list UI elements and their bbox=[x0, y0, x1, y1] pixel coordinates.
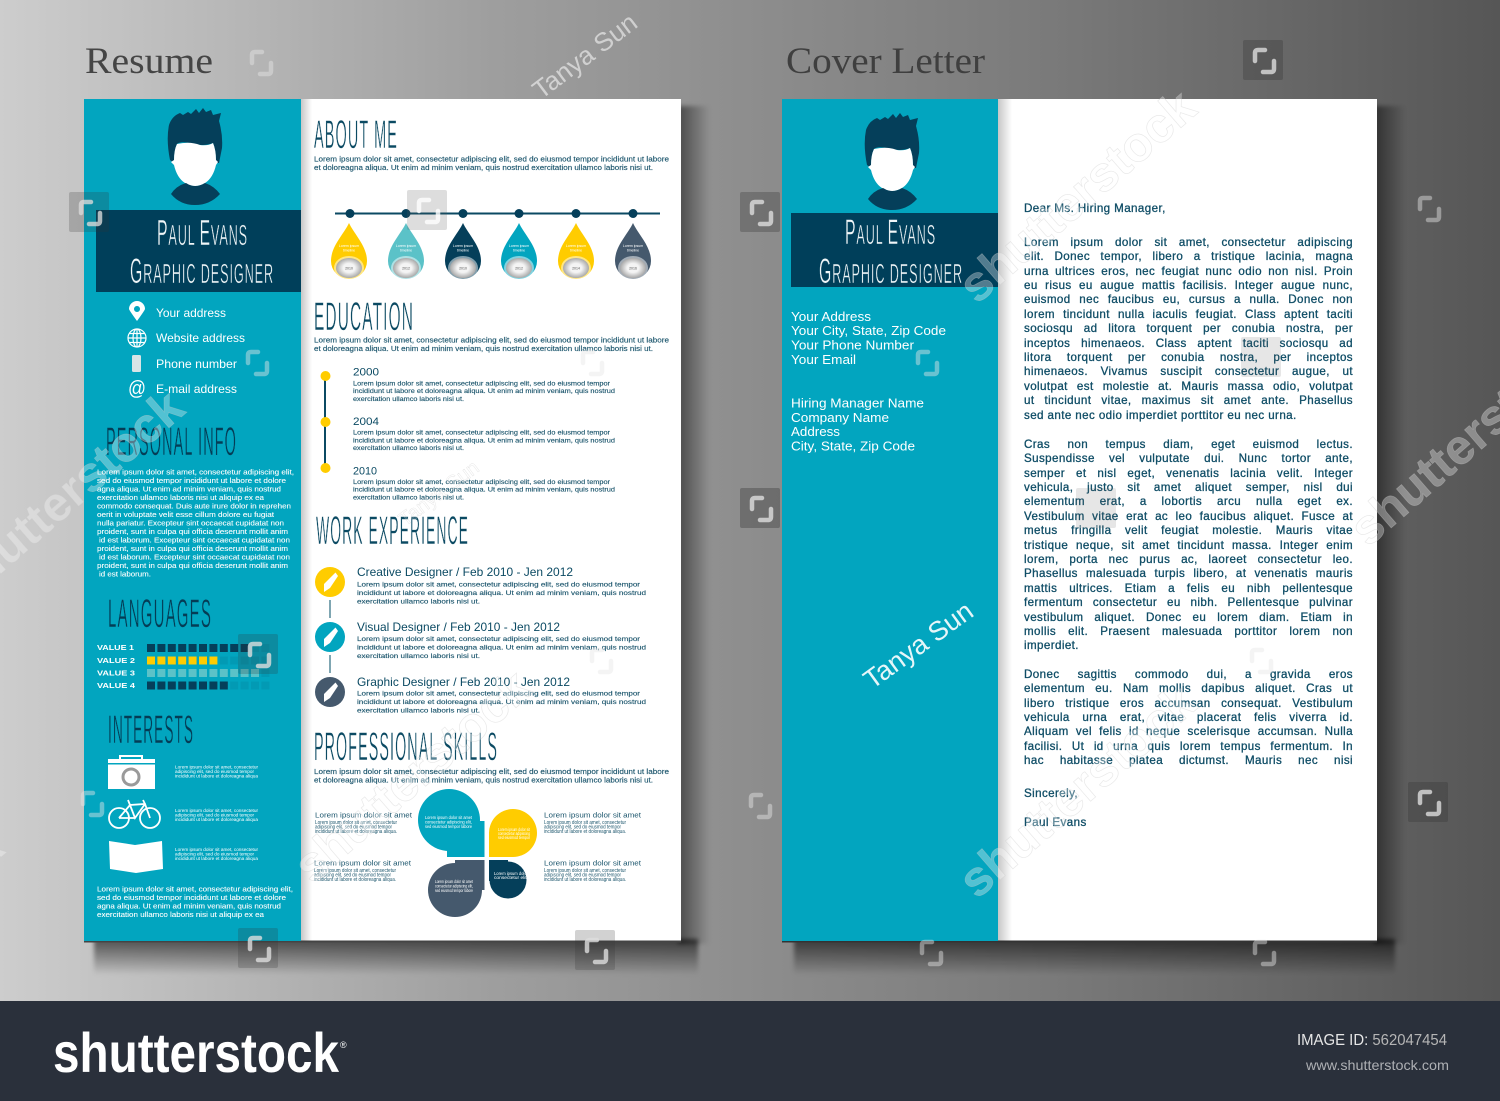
entry 2004: exercitation ullamco laboris nisi ut. bbox=[353, 445, 464, 452]
name banner: PAUL EVANS bbox=[845, 213, 936, 252]
drop 2010 dark: 2010 bbox=[459, 266, 467, 270]
sender details: Your Phone Number bbox=[791, 338, 915, 352]
icon: camera bbox=[108, 756, 155, 789]
entry 2000: exercitation ullamco laboris nisi ut. bbox=[353, 396, 464, 403]
sender details: Your Email bbox=[791, 352, 856, 367]
skill petal: teal: sed eiusmod tempor labore bbox=[425, 824, 472, 829]
entry 2010: Lorem ipsum dolor sit amet, consectetur adipiscing elit, sed do eiusmod tempor bbox=[353, 479, 611, 486]
skill petal: teal bbox=[418, 789, 484, 857]
section: interests: adipiscing elit, sed do eiusmod tempor bbox=[175, 852, 255, 856]
skill petal: slate: consectetur adipiscing elit, bbox=[435, 884, 473, 888]
skill petal: dark: consectetur elit, bbox=[494, 875, 528, 880]
skill petal: slate bbox=[428, 860, 484, 917]
skill petal: yellow: sed eiusmod tempor bbox=[498, 835, 530, 840]
name banner: GRAPHIC DESIGNER bbox=[130, 252, 274, 291]
job 1: Creative Designer / Feb 2010 - Jen 2012 bbox=[357, 565, 573, 579]
footer bar: ® bbox=[340, 1040, 347, 1050]
section: personal info: sed do eiusmod tempor incididunt ut labore et dolore bbox=[97, 476, 286, 485]
section: personal info: proident, sunt in culpa qui officia deserunt mollit anim bbox=[97, 544, 288, 553]
recipient details: Company Name bbox=[791, 410, 889, 425]
cover letter sign-off: Paul Evans bbox=[1024, 816, 1087, 829]
section: education: EDUCATION bbox=[314, 295, 414, 339]
icon: slate pen bbox=[315, 677, 345, 707]
drop 2010: Lorem ipsum bbox=[339, 244, 359, 248]
drop 2014 bbox=[558, 223, 594, 280]
bar chart: language levels bbox=[147, 644, 269, 690]
watermark: shutterstock marks: shutterstock bbox=[949, 674, 1207, 908]
skill label: top right: incididunt ut labore et doloreagna aliqua. bbox=[544, 829, 626, 835]
section: personal info: nulla pariatur. Excepteur sint occaecat cupidatat non bbox=[97, 518, 284, 528]
section: interests: Lorem ipsum dolor sit amet, consectetur bbox=[175, 764, 259, 770]
recipient details: Hiring Manager Name bbox=[791, 396, 924, 410]
skill label: bottom left: Lorem ipsum dolor sit amet, consectetur bbox=[314, 868, 396, 874]
skill petal: teal: Lorem ipsum dolor sit amet bbox=[425, 815, 473, 820]
skill label: bottom left: Lorem ipsum dolor sit amet bbox=[314, 860, 411, 868]
section: interests: Lorem ipsum dolor sit amet, consectetur bbox=[175, 808, 259, 813]
sender details: Your City, State, Zip Code bbox=[791, 323, 946, 338]
cover letter paragraph 2: mattis ultrices. Etiam a felis eu nibh pellentesque bbox=[1024, 582, 1353, 595]
section: personal info: id est laborum. Excepteur sint occaecat cupidatat non bbox=[99, 536, 290, 544]
cover letter paragraph 2: lorem, porta nec purus ac, laoreet consectetur leo. bbox=[1024, 553, 1353, 566]
cover letter paragraph 3 bbox=[1024, 668, 1353, 767]
cover letter sign-off bbox=[1024, 787, 1087, 829]
skill petal: dark bbox=[489, 860, 528, 898]
skill label: top left: adipiscing elit, sed do eiusmod tempor bbox=[315, 824, 392, 830]
section: interests: incididunt ut labore et doloreagna aliqua bbox=[175, 856, 259, 861]
cover letter paragraph 3: vehicula urna erat, vitae placerat felis viverra id. bbox=[1024, 711, 1353, 724]
skill label: top left: incididunt ut labore et doloreagna aliqua. bbox=[315, 829, 397, 835]
skill label: bottom left: incididunt ut labore et doloreagna aliqua. bbox=[314, 877, 396, 883]
skill label: bottom right: Lorem ipsum dolor sit amet bbox=[544, 860, 641, 868]
section: professional skills: Lorem ipsum dolor sit amet, consectetur adipiscing elit, sed do eiusmod tempor incididunt ut labore bbox=[314, 767, 669, 776]
job 3: exercitation ullamco laboris nisi ut. bbox=[357, 708, 480, 714]
watermark: open brackets bbox=[83, 52, 1439, 964]
icon: globe bbox=[128, 329, 146, 347]
heading: Cover Letter: Cover Letter bbox=[786, 41, 985, 82]
job 1: exercitation ullamco laboris nisi ut. bbox=[357, 598, 480, 606]
cover letter paragraph 1: sed ante nec odio imperdiet porttitor eu nec urna. bbox=[1024, 409, 1297, 422]
job 2: exercitation ullamco laboris nisi ut. bbox=[357, 653, 480, 660]
name banner: PAUL EVANS bbox=[157, 212, 248, 253]
drop 2014: 2014 bbox=[572, 266, 580, 270]
section: personal info: oerit in voluptate velit esse cillum dolore eu fugiat bbox=[97, 510, 275, 519]
job 1: Lorem ipsum dolor sit amet, consectetur adipiscing elit, sed do eiusmod tempor bbox=[357, 582, 641, 588]
job 1 bbox=[357, 565, 646, 606]
skill label: top right bbox=[544, 812, 641, 835]
cover letter paragraph 1: sociosqu ad litora torquent per conubia nostra, per bbox=[1024, 322, 1353, 335]
entry 2010: exercitation ullamco laboris nisi ut. bbox=[353, 494, 464, 502]
section: education: Lorem ipsum dolor sit amet, consectetur adipiscing elit, sed do eiusmod tempor incididunt ut labore bbox=[314, 336, 669, 344]
cover letter paragraph 2: mollis elit. Praesent malesuada porttitor lorem non bbox=[1024, 625, 1353, 638]
cover letter paragraph 1: lorem tincidunt nulla iaculis feugiat. Class aptent taciti bbox=[1024, 308, 1353, 321]
drop 2016: timeline bbox=[627, 248, 639, 252]
drop 2010 dark: Lorem ipsum bbox=[453, 244, 473, 248]
job 3 bbox=[357, 675, 646, 714]
section: languages bbox=[97, 592, 269, 690]
drop 2014: Lorem ipsum bbox=[566, 244, 586, 248]
cover letter paragraph 2: tristique neque, sit amet tincidunt massa. Integer enim bbox=[1024, 539, 1353, 552]
section: personal info: exercitation ullamco laboris nisi ut aliquip ex ea bbox=[97, 493, 265, 502]
cover letter paragraph 1: litora torquent per conubia nostra, per inceptos bbox=[1024, 351, 1353, 364]
cover letter paragraph 3: hac habitasse platea dictumst. Mauris nec nisi bbox=[1024, 754, 1353, 767]
cover letter salutation: Dear Ms. Hiring Manager, bbox=[1024, 202, 1166, 215]
drop 2010: timeline bbox=[343, 248, 355, 252]
cover letter paragraph 1: elit. Donec tempor, libero a tristique lacinia, magna bbox=[1024, 250, 1353, 263]
drop 2014: timeline bbox=[570, 248, 582, 252]
cover letter paragraph 1: urna ultrices eros, nec feugiat nunc odio non nisl. Proin bbox=[1024, 265, 1353, 278]
skill label: top right: Lorem ipsum dolor sit amet, consectetur bbox=[544, 820, 626, 826]
drop 2012 teal: 2012 bbox=[515, 266, 523, 270]
job 3: incididunt ut labore et doloreagna aliqua. Ut enim ad minim veniam, quis nostrud bbox=[357, 699, 646, 706]
skill label: top left bbox=[315, 812, 412, 835]
logo: shutterstock: shutterstock bbox=[53, 1021, 340, 1084]
panel: resume page bbox=[84, 99, 710, 975]
cover letter paragraph 3: libero tristique eros accumsan consequat. Vestibulum bbox=[1024, 697, 1353, 710]
icon: pin bbox=[129, 301, 145, 321]
job 3: Lorem ipsum dolor sit amet, consectetur adipiscing elit, sed do eiusmod tempor bbox=[357, 690, 641, 698]
entry 2010 bbox=[353, 466, 615, 502]
section: personal info: PERSONAL INFO bbox=[106, 420, 237, 464]
avatar bbox=[865, 113, 919, 210]
entry 2004: Lorem ipsum dolor sit amet, consectetur adipiscing elit, sed do eiusmod tempor bbox=[353, 430, 611, 436]
cover letter paragraph 3: Donec sagittis commodo dui, a gravida eros bbox=[1024, 668, 1353, 681]
name banner bbox=[791, 213, 998, 291]
icon: book bbox=[109, 841, 163, 873]
drop 2012 teal: Lorem ipsum bbox=[509, 244, 529, 248]
recipient details: City, State, Zip Code bbox=[791, 438, 915, 454]
entry 2004: incididunt ut labore et doloreagna aliqua. Ut enim ad minim veniam, quis nostrud bbox=[353, 438, 615, 444]
cover letter paragraph 2: semper et nisl eget, venenatis lacinia velit. Integer bbox=[1024, 467, 1353, 480]
skill petal: teal: consectetur adipiscing elit, bbox=[425, 820, 472, 824]
watermark: Tanya Sun cover: Tanya Sun bbox=[858, 596, 979, 695]
job 2: Visual Designer / Feb 2010 - Jen 2012 bbox=[357, 620, 560, 634]
icon: yellow pen bbox=[315, 567, 345, 597]
education timeline bbox=[320, 371, 330, 473]
section: personal info: id est laborum. bbox=[99, 570, 151, 578]
cover letter paragraph 2: elementum erat, a lobortis arcu nulla eget ex. bbox=[1024, 495, 1353, 508]
section: languages: VALUE 3 bbox=[97, 668, 135, 678]
cover letter paragraph 1: Lorem ipsum dolor sit amet, consectetur adipiscing bbox=[1024, 236, 1353, 249]
section: interests: incididunt ut labore et doloreagna aliqua bbox=[175, 817, 259, 822]
cover letter paragraph 2: fermentum consectetur eu nibh. Pellentesque pulvinar bbox=[1024, 596, 1353, 609]
section: personal info bbox=[97, 420, 294, 578]
skill petal: yellow: consectetur adipiscing bbox=[498, 831, 530, 836]
sidebar footer text: sed do eiusmod tempor incididunt ut labore et dolore bbox=[97, 893, 286, 902]
drop 2012 teal bbox=[501, 223, 537, 280]
drop 2010 dark: timeline bbox=[457, 248, 469, 252]
job 2: incididunt ut labore et doloreagna aliqua. Ut enim ad minim veniam, quis nostrud bbox=[357, 644, 646, 652]
cover letter paragraph 1: eu risus eu augue mattis facilisis. Integer augue nunc, bbox=[1024, 279, 1353, 292]
skill label: top left: Lorem ipsum dolor sit amet bbox=[315, 812, 412, 820]
recipient details bbox=[791, 396, 924, 454]
skill label: top right: adipiscing elit, sed do eiusmod tempor bbox=[544, 824, 621, 830]
section: languages: VALUE 1 bbox=[97, 643, 134, 652]
watermark: shutterstock marks bbox=[0, 92, 1500, 896]
cover letter paragraph 2: Suspendisse vel vulputate dui. Nunc tortor ante, bbox=[1024, 452, 1353, 465]
skill label: bottom right: incididunt ut labore et doloreagna aliqua. bbox=[544, 877, 626, 883]
watermark: Tanya Sun top: Tanya Sun bbox=[527, 7, 643, 105]
skill label: bottom right: adipiscing elit, sed do eiusmod tempor bbox=[544, 872, 621, 878]
name banner: GRAPHIC DESIGNER bbox=[819, 252, 963, 291]
skill petal: slate: Lorem ipsum dolor sit amet bbox=[435, 879, 474, 884]
section: about me bbox=[314, 113, 669, 280]
drop 2012: 2012 bbox=[402, 266, 410, 270]
entry 2000 bbox=[353, 366, 615, 403]
watermark: shutterstock marks: shutterstock bbox=[949, 79, 1207, 313]
section: about me: et doloreagna aliqua. Ut enim ad minim veniam, quis nostrud exercitation ullamco laboris nisi ut. bbox=[314, 163, 653, 172]
icon: phone bbox=[132, 355, 141, 372]
skill label: bottom right bbox=[544, 860, 641, 883]
entry 2004: 2004 bbox=[353, 416, 379, 428]
timeline bbox=[331, 209, 660, 280]
heading: Resume: Resume bbox=[85, 41, 213, 82]
section: professional skills: PROFESSIONAL SKILLS bbox=[314, 725, 498, 769]
skill petal: dark: Lorem ipsum dolor bbox=[494, 871, 528, 876]
cover letter paragraph 2: imperdiet. bbox=[1024, 639, 1079, 652]
contact details bbox=[128, 301, 245, 400]
cover letter sign-off: Sincerely, bbox=[1024, 787, 1078, 800]
section: personal info: commodo consequat. Duis aute irure dolor in reprehen bbox=[97, 502, 291, 510]
job 1: incididunt ut labore et doloreagna aliqua. Ut enim ad minim veniam, quis nostrud bbox=[357, 590, 646, 597]
entry 2004 bbox=[353, 416, 615, 452]
panel: cover letter page bbox=[782, 99, 1406, 975]
drop 2010 dark bbox=[445, 223, 481, 280]
cover letter paragraph 2: Vestibulum vitae erat ac leo faucibus aliquet. Fusce at bbox=[1024, 510, 1353, 523]
skill label: bottom right: Lorem ipsum dolor sit amet, consectetur bbox=[544, 868, 626, 874]
entry 2010: 2010 bbox=[353, 466, 377, 478]
drop 2016: Lorem ipsum bbox=[623, 244, 643, 248]
cover letter paragraph 2: Phasellus malesuada turpis libero, at venenatis mauris bbox=[1024, 567, 1353, 580]
section: about me: Lorem ipsum dolor sit amet, consectetur adipiscing elit, sed do eiusmod tempor incididunt ut labore bbox=[314, 154, 669, 164]
name banner bbox=[96, 210, 301, 292]
skill label: top left: Lorem ipsum dolor sit amet, consectetur bbox=[315, 820, 397, 826]
sidebar footer text: exercitation ullamco laboris nisi ut aliquip ex ea bbox=[97, 910, 265, 919]
contact details: Website address bbox=[156, 331, 245, 345]
section: interests: INTERESTS bbox=[108, 708, 194, 752]
entry 2000: 2000 bbox=[353, 366, 379, 378]
job 2 bbox=[357, 620, 646, 660]
section: personal info: Lorem ipsum dolor sit amet, consectetur adipiscing elit, bbox=[97, 468, 294, 476]
section: languages: VALUE 4 bbox=[97, 681, 136, 690]
entry 2000: Lorem ipsum dolor sit amet, consectetur adipiscing elit, sed do eiusmod tempor bbox=[353, 380, 611, 388]
section: personal info: agna aliqua. Ut enim ad minim veniam, quis nostrud bbox=[97, 484, 281, 494]
cover letter paragraph 3: Aliquam vel felis id neque scelerisque accumsan. Nulla bbox=[1024, 725, 1353, 738]
image id: IMAGE ID: 562047454 bbox=[1297, 1032, 1447, 1049]
icon: bicycle bbox=[109, 800, 160, 828]
skill label: top right: Lorem ipsum dolor sit amet bbox=[544, 812, 641, 820]
section: personal info: id est laborum. Excepteur sint occaecat cupidatat non bbox=[99, 552, 290, 562]
skill label: bottom left bbox=[314, 860, 411, 883]
section: personal info: proident, sunt in culpa qui officia deserunt mollit anim bbox=[97, 527, 288, 536]
section: interests: adipiscing elit, sed do eiusmod tempor bbox=[175, 769, 255, 774]
section: personal info: proident, sunt in culpa qui officia deserunt mollit anim bbox=[97, 561, 288, 570]
drop 2016: 2016 bbox=[629, 266, 637, 270]
drop 2016 bbox=[615, 223, 651, 280]
section: interests: incididunt ut labore et doloreagna aliqua bbox=[175, 774, 259, 778]
avatar bbox=[168, 108, 222, 205]
icon: at sign: @ bbox=[128, 378, 146, 400]
section: work experience bbox=[315, 509, 646, 714]
section: professional skills bbox=[314, 725, 669, 917]
watermark: Tanya Sun middle: Tanya Sun bbox=[395, 457, 483, 531]
watermark: boxed brackets bbox=[69, 40, 1448, 970]
drop 2012 bbox=[388, 223, 424, 280]
cover letter paragraph 1: ut tincidunt vitae, maximus sit amet ante. Phasellus bbox=[1024, 394, 1353, 407]
sender details: Your Address bbox=[791, 309, 872, 324]
section: interests bbox=[108, 708, 259, 873]
cover letter paragraph 2: vehicula, justo sit amet aliquet semper, nisl dui bbox=[1024, 481, 1353, 494]
section: work experience: WORK EXPERIENCE bbox=[316, 509, 469, 553]
sidebar footer text: Lorem ipsum dolor sit amet, consectetur adipiscing elit, bbox=[97, 884, 293, 894]
section: education: et doloreagna aliqua. Ut enim ad minim veniam, quis nostrud exercitation ullamco laboris nisi ut. bbox=[314, 344, 653, 353]
section: interests: adipiscing elit, sed do eiusmod tempor bbox=[175, 812, 255, 818]
cover letter paragraph 2: vestibulum aliquet. Donec eu lorem diam. Etiam in bbox=[1024, 611, 1353, 624]
skill petal: slate: sed eiusmod tempor labore bbox=[435, 888, 473, 893]
contact details: E-mail address bbox=[156, 382, 237, 396]
section: professional skills: et doloreagna aliqua. Ut enim ad minim veniam, quis nostrud exercitation ullamco laboris nisi ut. bbox=[314, 776, 653, 784]
drop 2010: 2010 bbox=[345, 266, 353, 270]
sidebar footer text: agna aliqua. Ut enim ad minim veniam, quis nostrud bbox=[97, 902, 281, 910]
section: about me: ABOUT ME bbox=[314, 113, 398, 157]
drop 2012: timeline bbox=[400, 248, 412, 252]
drop 2012: Lorem ipsum bbox=[396, 244, 416, 248]
cover letter paragraph 1: euismod nec faucibus eu, cursus a nulla. Donec non bbox=[1024, 293, 1353, 306]
footer bar bbox=[0, 1001, 1500, 1101]
cover letter paragraph 1 bbox=[1024, 236, 1353, 422]
cover letter paragraph 3: elementum eu. Nam mollis dapibus aliquet. Cras ut bbox=[1024, 682, 1353, 695]
sender details bbox=[791, 309, 946, 367]
cover letter paragraph 2 bbox=[1024, 438, 1353, 652]
drop 2010 bbox=[331, 223, 367, 280]
skill petal: yellow bbox=[489, 809, 537, 857]
entry 2000: incididunt ut labore et doloreagna aliqua. Ut enim ad minim veniam, quis nostrud bbox=[353, 388, 615, 395]
cover letter paragraph 1: himenaeos. Vivamus suscipit consectetur augue, ut bbox=[1024, 365, 1353, 378]
skill label: bottom left: adipiscing elit, sed do eiusmod tempor bbox=[314, 872, 391, 878]
sidebar footer text bbox=[97, 884, 293, 919]
cover letter paragraph 2: metus fringilla velit feugiat molestie. Mauris vitae bbox=[1024, 524, 1353, 537]
cover letter paragraph 3: facilisi. Ut id urna quis lorem tempus fermentum. In bbox=[1024, 740, 1353, 753]
cover letter paragraph 1: inceptos himenaeos. Class aptent taciti sociosqu ad bbox=[1024, 337, 1353, 350]
recipient details: Address bbox=[791, 424, 841, 439]
cover letter paragraph 1: volutpat est molestie at. Mauris massa odio, volutpat bbox=[1024, 380, 1353, 393]
section: interests: Lorem ipsum dolor sit amet, consectetur bbox=[175, 847, 259, 852]
skill petal: yellow: Lorem ipsum dolor sit bbox=[498, 827, 531, 832]
job 3: Graphic Designer / Feb 2010 - Jen 2012 bbox=[357, 675, 570, 689]
section: languages: VALUE 2 bbox=[97, 656, 135, 665]
section: education bbox=[314, 295, 669, 502]
section: languages: LANGUAGES bbox=[108, 592, 212, 636]
drop 2012 teal: timeline bbox=[513, 248, 525, 252]
watermark: shutterstock marks: shutterstock bbox=[284, 659, 542, 893]
contact details: Your address bbox=[156, 306, 226, 320]
contact details: Phone number bbox=[156, 357, 237, 371]
icon: teal pen bbox=[315, 622, 345, 652]
entry 2010: incididunt ut labore et doloreagna aliqua. Ut enim ad minim veniam, quis nostrud bbox=[353, 486, 615, 494]
job 2: Lorem ipsum dolor sit amet, consectetur adipiscing elit, sed do eiusmod tempor bbox=[357, 636, 641, 643]
cover letter paragraph 2: Cras non tempus diam, eget euismod lectus. bbox=[1024, 438, 1353, 451]
website: www.shutterstock.com bbox=[1305, 1057, 1449, 1073]
